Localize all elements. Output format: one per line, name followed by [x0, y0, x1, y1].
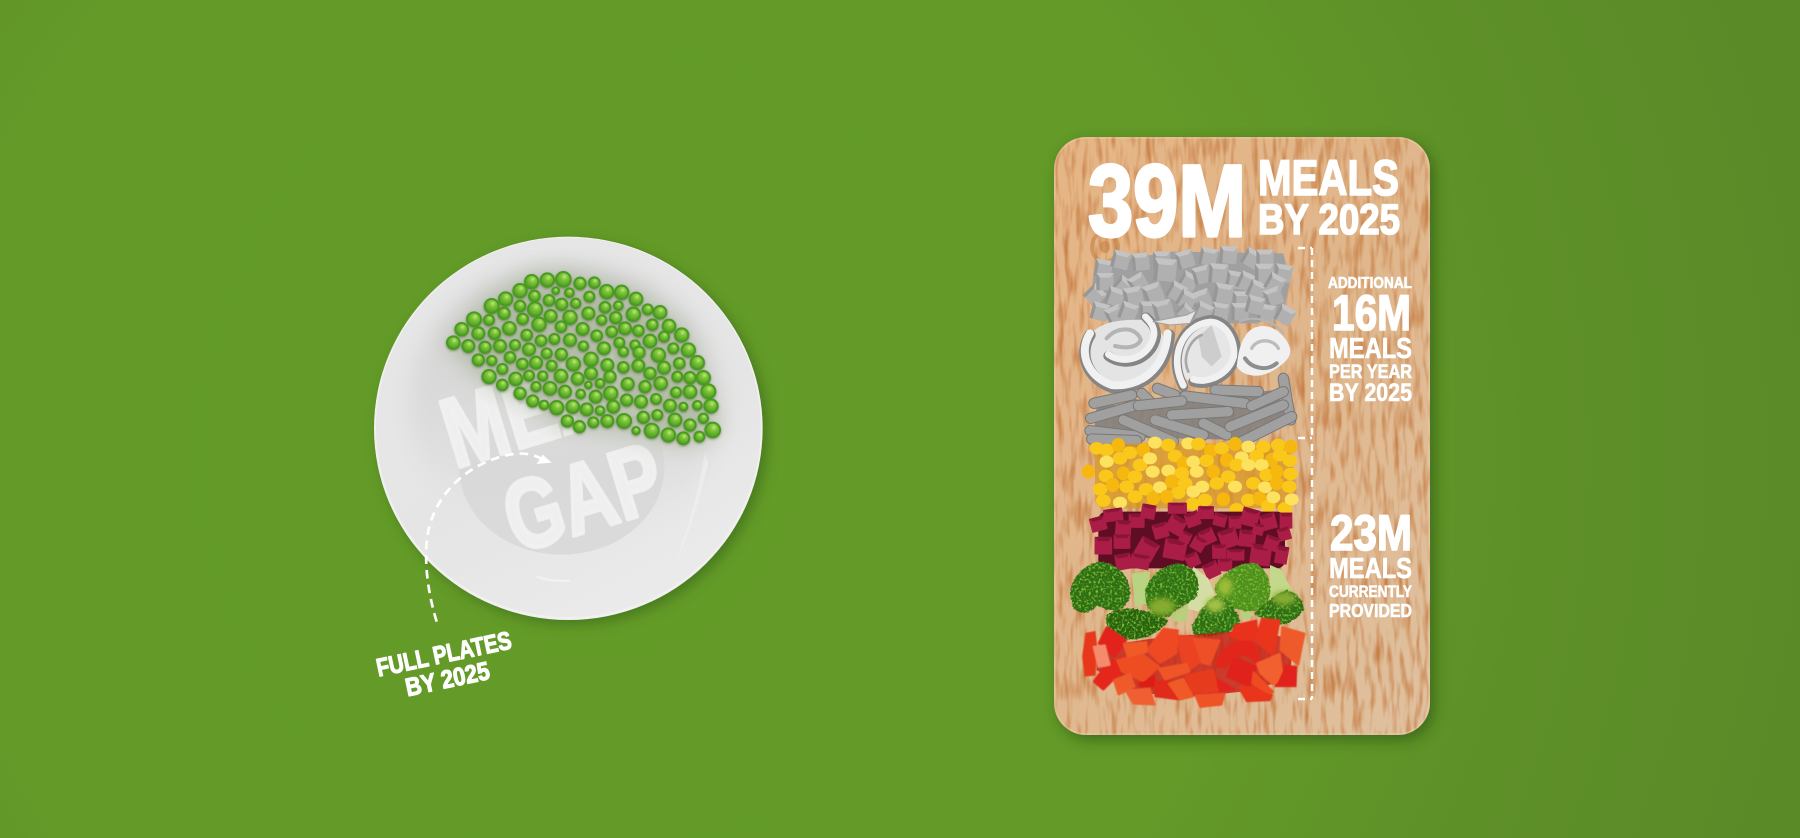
- text block: additional 16M meals per year by 2025: [1328, 275, 1412, 407]
- vegetables: grey onions (additional meals): [1085, 310, 1290, 390]
- text block: additional 16M meals per year by 2025: BY 2025: [1329, 379, 1412, 407]
- plate text: meal gap: GAP: [491, 421, 676, 573]
- board: [1054, 137, 1430, 735]
- text block: additional 16M meals per year by 2025: MEALS: [1329, 333, 1412, 365]
- board shadow: [1058, 142, 1434, 740]
- heading: 39M meals by 2025: [1088, 144, 1400, 258]
- plate text: meal gap: [429, 321, 676, 573]
- vegetables: broccoli: [1070, 562, 1304, 640]
- label: full plates by 2025: [374, 627, 514, 702]
- text block: 23M meals currently provided: [1329, 505, 1413, 621]
- vegetables: grey cubes (additional meals): [1083, 246, 1297, 327]
- label: full plates by 2025: BY 2025: [403, 657, 492, 702]
- text block: additional 16M meals per year by 2025: 16M: [1332, 285, 1411, 341]
- broccoli highlights: [1148, 578, 1296, 615]
- bracket: dashed scale for meals: [1298, 248, 1312, 699]
- peas: [447, 272, 720, 447]
- vegetables: corn: [1082, 437, 1299, 516]
- text block: 23M meals currently provided: MEALS: [1329, 553, 1412, 585]
- heading: 39M meals by 2025: 39M: [1088, 144, 1246, 258]
- plate text: meal gap: MEAL: [429, 321, 665, 488]
- text block: additional 16M meals per year by 2025: ADDITIONAL: [1328, 275, 1412, 292]
- heading: 39M meals by 2025: MEALS: [1258, 150, 1399, 206]
- text block: 23M meals currently provided: PROVIDED: [1329, 601, 1412, 621]
- heading: 39M meals by 2025: BY 2025: [1258, 196, 1400, 244]
- text block: 23M meals currently provided: 23M: [1330, 505, 1412, 561]
- plate: [374, 237, 763, 620]
- text block: 23M meals currently provided: CURRENTLY: [1329, 582, 1413, 601]
- plate shadow: [379, 242, 767, 624]
- arrow: dashed curve to meal gap: [426, 454, 552, 622]
- vegetables: grey green beans (additional meals): [1090, 378, 1292, 442]
- text block: additional 16M meals per year by 2025: PER YEAR: [1329, 362, 1412, 383]
- panel: cutting board: [1054, 137, 1434, 740]
- label: full plates by 2025: FULL PLATES: [374, 627, 514, 683]
- panel: plate with meal gap: [374, 237, 767, 624]
- vegetables: beetroot: [1089, 503, 1292, 580]
- vegetables: red peppers: [1083, 618, 1305, 707]
